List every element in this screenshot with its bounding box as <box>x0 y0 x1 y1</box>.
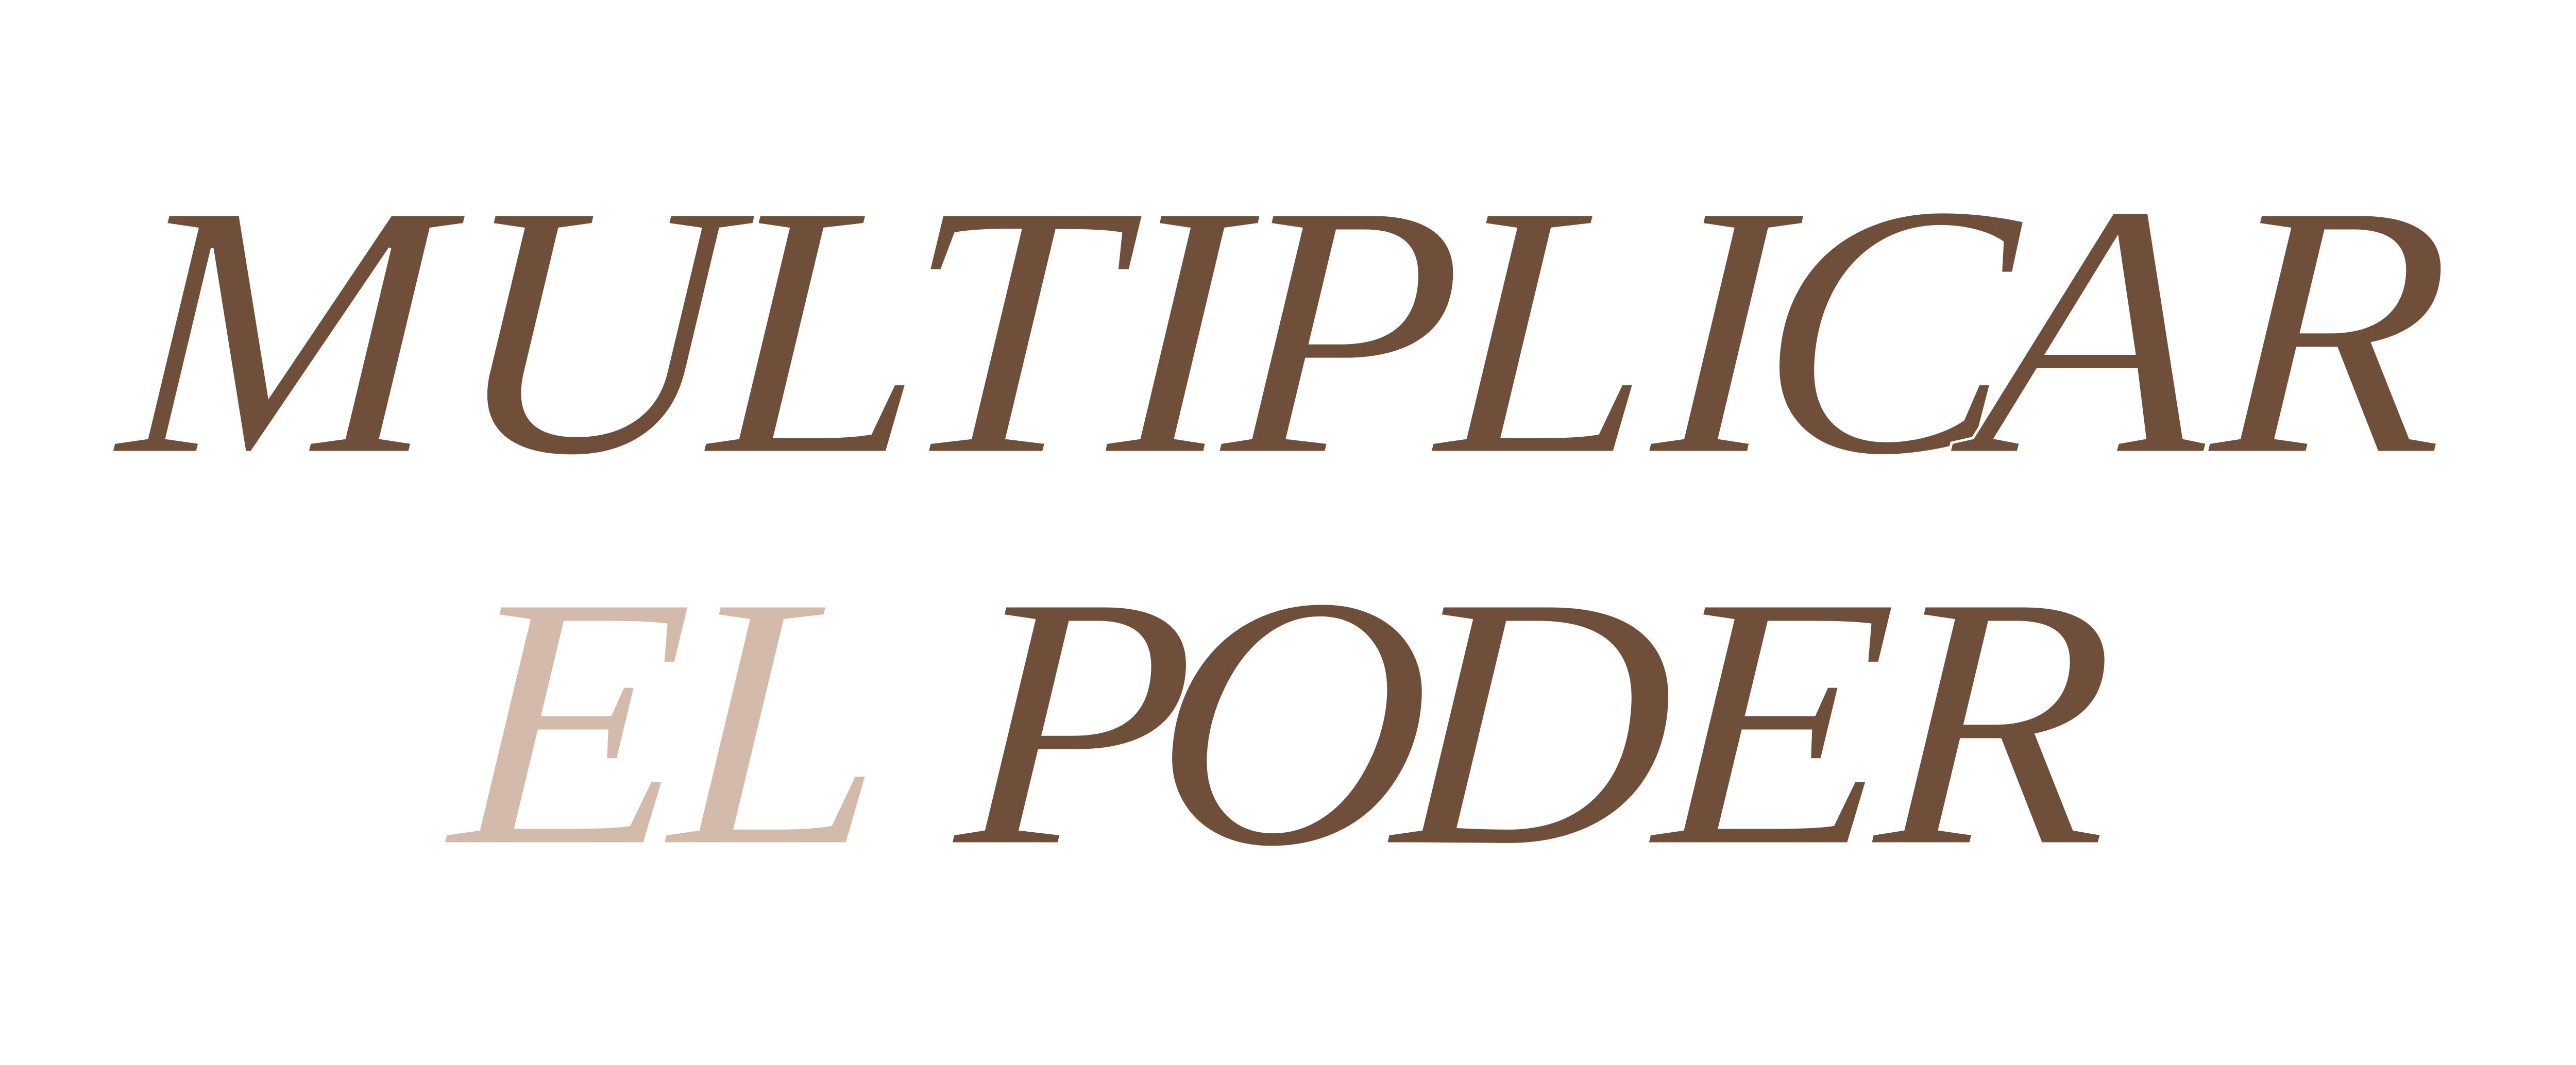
title <box>106 129 2460 922</box>
title line 2, dark word: PODER: PODER <box>943 521 2124 922</box>
title line 1: MULTIPLICAR: MULTIPLICAR <box>106 129 2460 531</box>
title line 2, light words: EL: EL <box>438 521 898 922</box>
